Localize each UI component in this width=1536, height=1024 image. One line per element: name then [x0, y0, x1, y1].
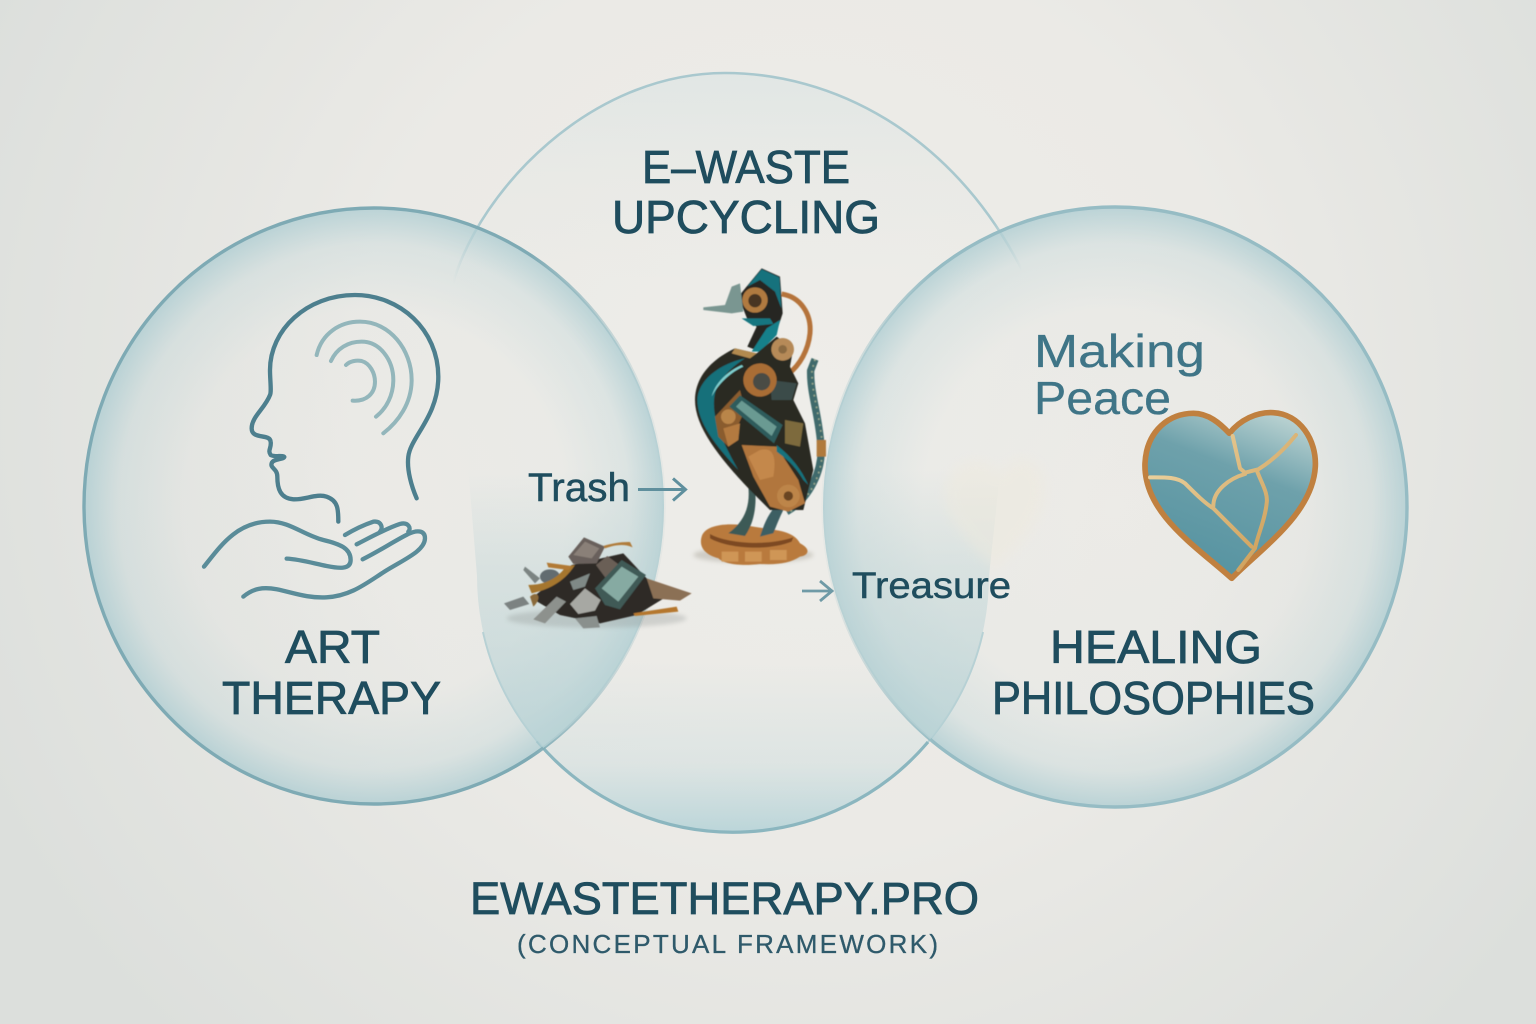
label: making peace: Peace [1034, 372, 1171, 424]
image: statue made of e-waste [693, 268, 826, 565]
heading: e-waste upcycling [612, 141, 880, 243]
label: treasure with arrow: Treasure [852, 565, 1011, 606]
copper body part [742, 445, 805, 512]
legs [728, 487, 756, 536]
circuit board module [729, 395, 783, 443]
overlap lens: right [852, 514, 992, 739]
copper capacitors [771, 338, 794, 361]
bird head [738, 268, 783, 352]
head outline [252, 295, 438, 522]
label: making peace [1034, 325, 1205, 424]
faint ghost heart [945, 459, 1045, 570]
heading: healing philosophies: PHILOSOPHIES [992, 672, 1315, 724]
icon: head with sound waves over open hand [204, 295, 438, 597]
overlap lens: left [472, 514, 634, 748]
circle: e-waste upcycling [453, 73, 1022, 832]
statue shadow [693, 547, 813, 563]
image: e-waste pile [504, 537, 692, 628]
heading: healing philosophies [992, 621, 1315, 724]
open hand [204, 522, 425, 597]
tail [787, 359, 821, 512]
copper ring tube [782, 294, 810, 374]
footer: site title: EWASTETHERAPY.PRO [470, 873, 979, 924]
circle: healing philosophies [823, 207, 1407, 807]
brain waves [317, 322, 412, 433]
label: making peace: Making [1034, 325, 1205, 377]
icon: kintsugi heart [1145, 413, 1315, 578]
copper base [701, 524, 807, 565]
gold cracks [1150, 435, 1296, 570]
heading: healing philosophies: HEALING [1050, 621, 1262, 673]
teal body [695, 337, 813, 510]
label: trash with arrow [528, 466, 686, 510]
footer: subtitle: (CONCEPTUAL FRAMEWORK) [517, 929, 938, 959]
heading: e-waste upcycling: E–WASTE [642, 141, 850, 193]
heading: art therapy: THERAPY [222, 672, 441, 724]
heading: art therapy: ART [285, 621, 380, 673]
circle: art therapy [84, 208, 664, 804]
heading: e-waste upcycling: UPCYCLING [612, 191, 880, 243]
label: trash with arrow: Trash [528, 466, 630, 510]
heading: art therapy [222, 621, 441, 724]
